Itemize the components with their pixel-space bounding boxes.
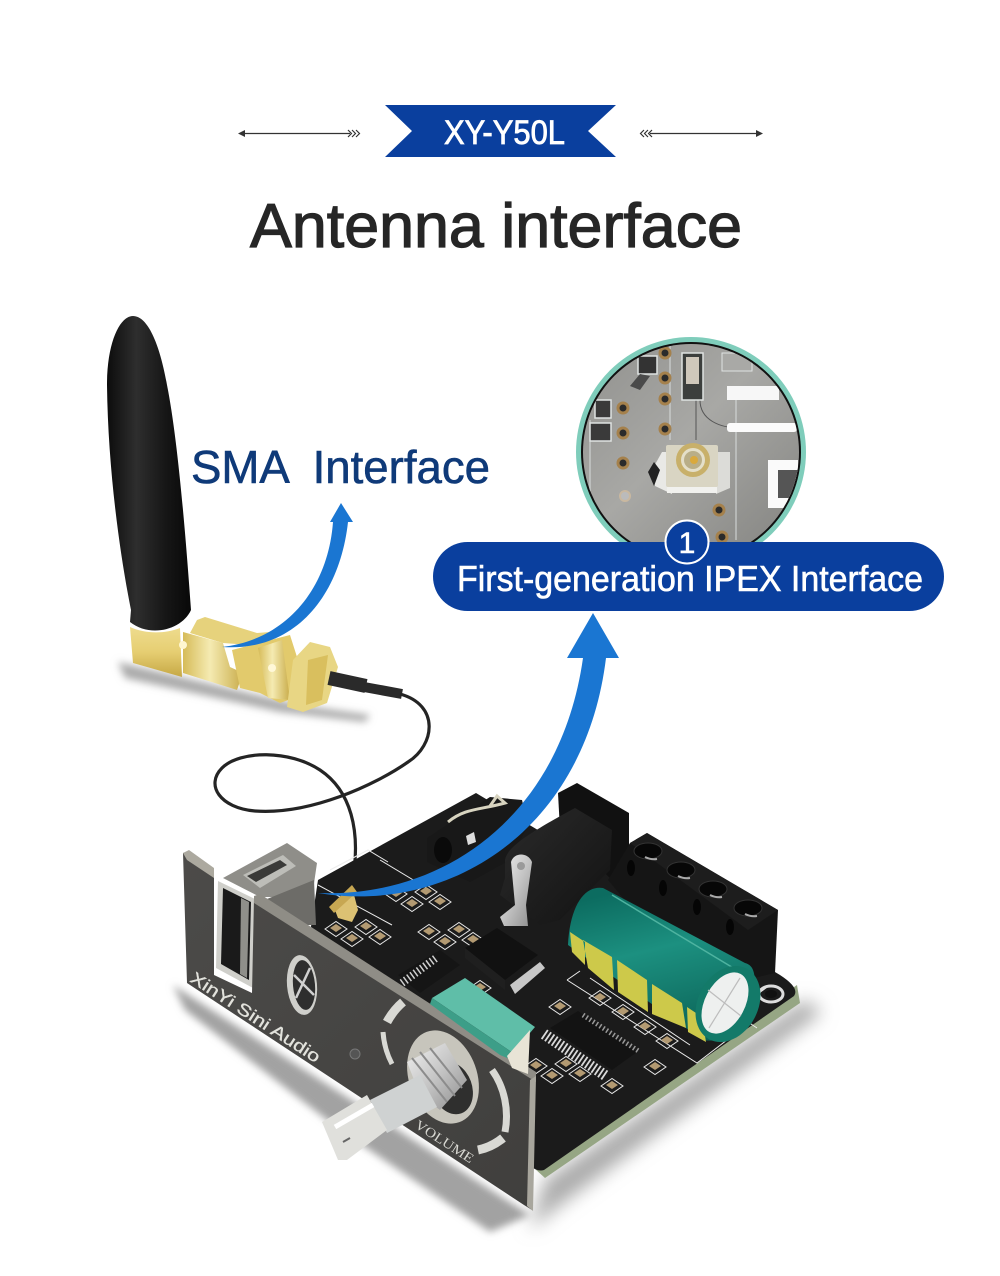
number badge (666, 520, 708, 564)
model ribbon badge: XY-Y50L (444, 114, 565, 152)
volume dial arcs (383, 1002, 506, 1150)
drop shadows (173, 985, 530, 1232)
speaker slot (284, 954, 320, 1016)
silk pads (682, 353, 703, 400)
SMD components (385, 884, 451, 912)
left divider arrow (238, 130, 360, 137)
title: Antenna interface (250, 192, 742, 261)
model ribbon badge (385, 105, 616, 157)
right divider arrow (640, 130, 763, 137)
front panel (183, 852, 536, 1210)
antenna rubber body (107, 316, 191, 631)
panel VOLUME text: VOLUME (412, 1117, 477, 1166)
label: SMA interface: SMA Interface (191, 441, 490, 493)
electrolytic capacitor (568, 888, 773, 1053)
coax cable (215, 694, 429, 883)
connector body (654, 452, 672, 494)
vias (618, 348, 727, 542)
gold connector (130, 617, 338, 712)
audio board (173, 783, 822, 1232)
silkscreen traces (318, 850, 770, 1063)
callout pill: first-generation IPEX interface (433, 520, 944, 611)
blue arrow to IPEX interface (318, 613, 619, 896)
cable sleeve (329, 678, 366, 686)
number badge: 1 (679, 527, 695, 560)
green switch block (430, 978, 535, 1074)
panel brand text: XinYi Sini Audio (187, 968, 324, 1067)
PCB (534, 985, 800, 1178)
USB socket housing (216, 843, 317, 988)
screw terminal block (608, 833, 778, 980)
blue arrow to SMA interface (222, 503, 353, 647)
regulator (465, 928, 545, 994)
antenna with SMA connector (107, 316, 429, 883)
headphone jack (427, 796, 528, 882)
small IC (398, 950, 460, 993)
DC power jack (500, 783, 629, 926)
main IC (544, 1011, 640, 1076)
callout pill: first-generation IPEX interface: First-generation IPEX Interface (457, 558, 923, 599)
volume potentiometer (322, 1020, 491, 1160)
inset: IPEX connector close-up (576, 337, 806, 542)
IPEX connector on board (329, 885, 358, 922)
